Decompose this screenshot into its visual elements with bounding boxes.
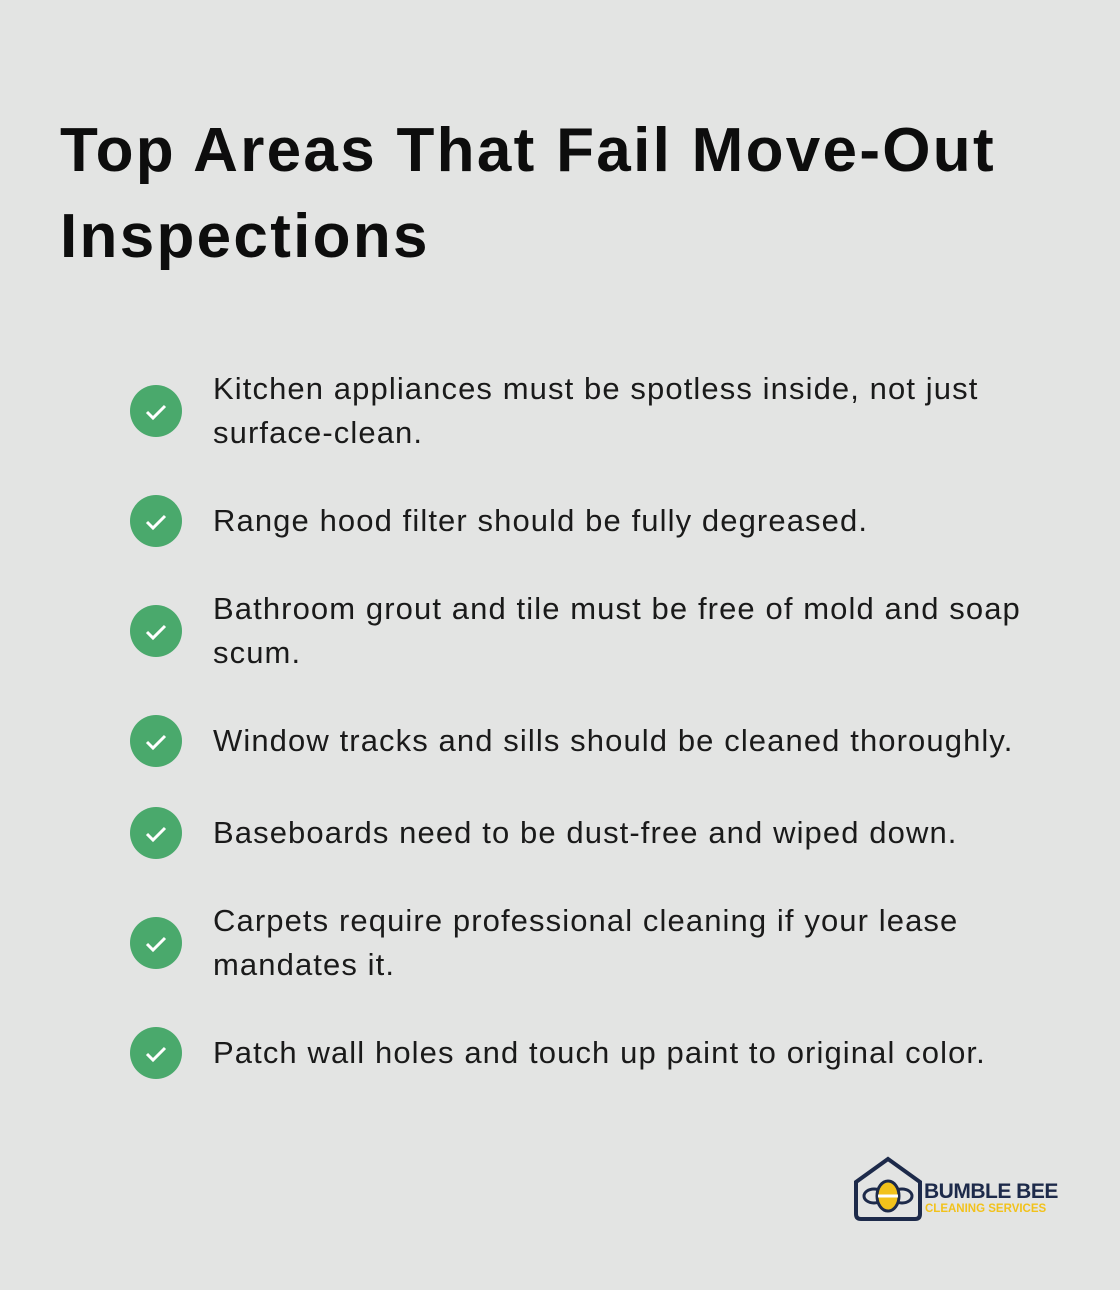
item 6: Carpets require professional cleaning if your lease [213,903,958,938]
item 3: scum. [213,635,301,670]
brand text: BUMBLE BEE [924,1180,1058,1203]
item 3: Bathroom grout and tile must be free of mold and soap [213,591,1021,626]
item 1: Kitchen appliances must be spotless inside, not just [213,371,978,406]
item 1 [130,371,978,450]
item 7: Patch wall holes and touch up paint to original color. [213,1035,986,1070]
title: Inspections [60,202,430,271]
item 2 [130,495,868,547]
item 4 [130,715,1013,767]
item 2: Range hood filter should be fully degreased. [213,503,868,538]
item 7 [130,1027,986,1079]
item 4: Window tracks and sills should be cleaned thoroughly. [213,723,1013,758]
logo [854,1156,1058,1221]
item 6 [130,903,958,982]
item 1: surface-clean. [213,415,423,450]
item 3 [130,591,1021,670]
logo: CLEANING SERVICES [925,1203,1046,1215]
icon: bee house [854,1156,922,1221]
item 5 [130,807,958,859]
item 5: Baseboards need to be dust-free and wiped down. [213,815,958,850]
item 6: mandates it. [213,947,395,982]
title [60,116,996,271]
title: Top Areas That Fail Move-Out [60,116,996,185]
